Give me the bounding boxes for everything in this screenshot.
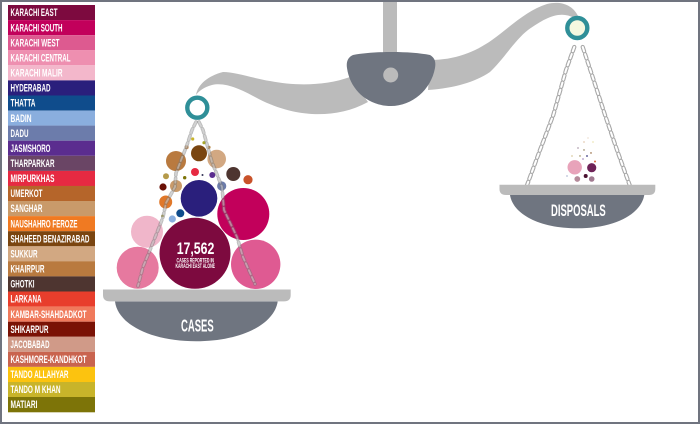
disposals bubbles (566, 138, 596, 182)
legend row: Hyderabad (8, 80, 95, 96)
legend row: Umerkot (8, 186, 95, 201)
disposals label: DISPOSALS (551, 202, 606, 220)
legend row: Tando Allahyar: TANDO ALLAHYAR (10, 369, 69, 381)
bubble: Dadu (217, 181, 226, 191)
legend row: Larkana (8, 292, 95, 307)
cases bubbles (117, 137, 280, 289)
bubble: Shikarpur (159, 183, 167, 191)
legend row: Karachi East: KARACHI EAST (10, 7, 58, 19)
legend row: Naushahro Feroze (8, 216, 95, 231)
bubble: Matiari (183, 176, 186, 179)
bubble: Karachi West (231, 240, 280, 289)
case count: 17,562 (177, 239, 214, 258)
legend row: Karachi Malir: KARACHI MALIR (10, 68, 63, 80)
legend row: Kambar-Shahdadkot: KAMBAR-SHAHDADKOT (10, 309, 87, 321)
legend row: Shaheed Benazirabad (8, 231, 95, 246)
cases bowl (115, 302, 278, 341)
legend row: Tando Allahyar (8, 367, 95, 382)
legend row: Sukkur (8, 246, 95, 261)
legend row: Ghotki (8, 276, 95, 292)
legend row: Badin: BADIN (10, 113, 32, 125)
legend row: Jacobabad: JACOBABAD (10, 339, 50, 351)
beam left arm (196, 72, 368, 114)
bubble: Shaheed Benazirabad (191, 145, 207, 161)
tiny bubbles near chain (161, 137, 211, 217)
bubble: Mirpurkhas (191, 168, 199, 176)
legend row: Kashmore-Kandhkot (8, 352, 95, 367)
legend row: Ghotki: GHOTKI (10, 279, 34, 291)
legend row: Thatta (8, 96, 95, 111)
legend row: Larkana: LARKANA (10, 294, 42, 306)
legend row: Karachi West: KARACHI WEST (10, 37, 60, 49)
legend: districts (8, 5, 95, 412)
bubble: Thatta (176, 209, 184, 217)
legend row: Dadu (8, 126, 95, 141)
bubble: mauve right (589, 176, 594, 182)
bubble: Khairpur (166, 151, 186, 171)
legend row: Badin (8, 111, 95, 126)
bubble: Tharparkar small (202, 174, 204, 176)
scale beam (196, 3, 578, 114)
bubble: dark centre (584, 174, 588, 178)
bubble: large pink (568, 160, 582, 174)
bubble: mauve left (574, 176, 580, 182)
legend row: Jasmshoro (8, 141, 95, 156)
scale hub (347, 52, 435, 106)
bubble: Ghotki (226, 167, 240, 181)
right ring (567, 18, 587, 38)
legend row: Sukkur: SUKKUR (10, 248, 38, 260)
small scattered bubbles (566, 138, 596, 177)
case caption line 2: KARACHI EAST ALONE (176, 264, 215, 270)
legend row: Matiari: MATIARI (10, 399, 38, 411)
cases pan (103, 290, 291, 341)
legend row: Karachi Central (8, 50, 95, 65)
legend row: Karachi Central: KARACHI CENTRAL (10, 52, 71, 64)
main bubble: Karachi East callout (160, 218, 230, 289)
legend row: Jacobabad (8, 337, 95, 352)
bubble: Karachi Malir (131, 216, 163, 248)
chains: disposals pan (527, 47, 630, 186)
disposals plate (500, 185, 655, 195)
legend row: Kambar-Shahdadkot (8, 307, 95, 322)
legend row: Shikarpur (8, 322, 95, 337)
bubble: Karachi Central (117, 247, 159, 289)
legend row: Naushahro Feroze: NAUSHAHRO FEROZE (10, 218, 78, 230)
legend row: Sanghar (8, 201, 95, 216)
legend row: Tharparkar: THARPARKAR (10, 158, 55, 170)
legend row: Jasmshoro: JASMSHORO (10, 143, 51, 155)
bubble: Tando M Khan (163, 173, 169, 179)
scale post (383, 2, 397, 56)
bubble: Kashmore-Kandhkot (243, 175, 253, 184)
legend row: Sanghar: SANGHAR (10, 203, 43, 215)
legend row: Umerkot: UMERKOT (10, 188, 43, 200)
legend row: Mirpurkhas (8, 171, 95, 186)
bubble: Jasmshoro (209, 172, 215, 178)
legend row: Karachi South: KARACHI SOUTH (10, 22, 63, 34)
cases label: CASES (181, 316, 214, 336)
bubble: Naushahro Feroze (159, 196, 172, 208)
legend row: Matiari (8, 397, 95, 412)
legend row: Thatta: THATTA (10, 98, 36, 110)
bubble: Hyderabad (181, 180, 217, 217)
bubble: Sukkur (207, 150, 226, 168)
legend row: Hyderabad: HYDERABAD (10, 83, 51, 95)
case caption line 1: CASES REPORTED IN (176, 258, 214, 264)
legend row: Khairpur (8, 261, 95, 276)
bubble: Sanghar (170, 180, 182, 192)
bubble: Badin (169, 215, 176, 223)
legend row: Dadu: DADU (10, 128, 29, 140)
legend row: Kashmore-Kandhkot: KASHMORE-KANDHKOT (10, 354, 87, 366)
cases plate (103, 290, 291, 301)
disposals bowl (510, 195, 644, 228)
left ring (187, 98, 207, 118)
disposals pan (500, 185, 655, 228)
legend row: Shikarpur: SHIKARPUR (10, 324, 49, 336)
chains: cases pan (138, 122, 255, 286)
legend row: Mirpurkhas: MIRPURKHAS (10, 173, 54, 185)
legend row: Shaheed Benazirabad: SHAHEED BENAZIRABAD (10, 233, 90, 245)
bubble: dark purple (587, 163, 596, 172)
bubble: Karachi South (217, 188, 269, 240)
hub pivot (383, 68, 398, 82)
beam right arm (428, 3, 578, 90)
legend row: Tando M Khan: TANDO M KHAN (10, 384, 61, 396)
legend row: Khairpur: KHAIRPUR (10, 264, 45, 276)
